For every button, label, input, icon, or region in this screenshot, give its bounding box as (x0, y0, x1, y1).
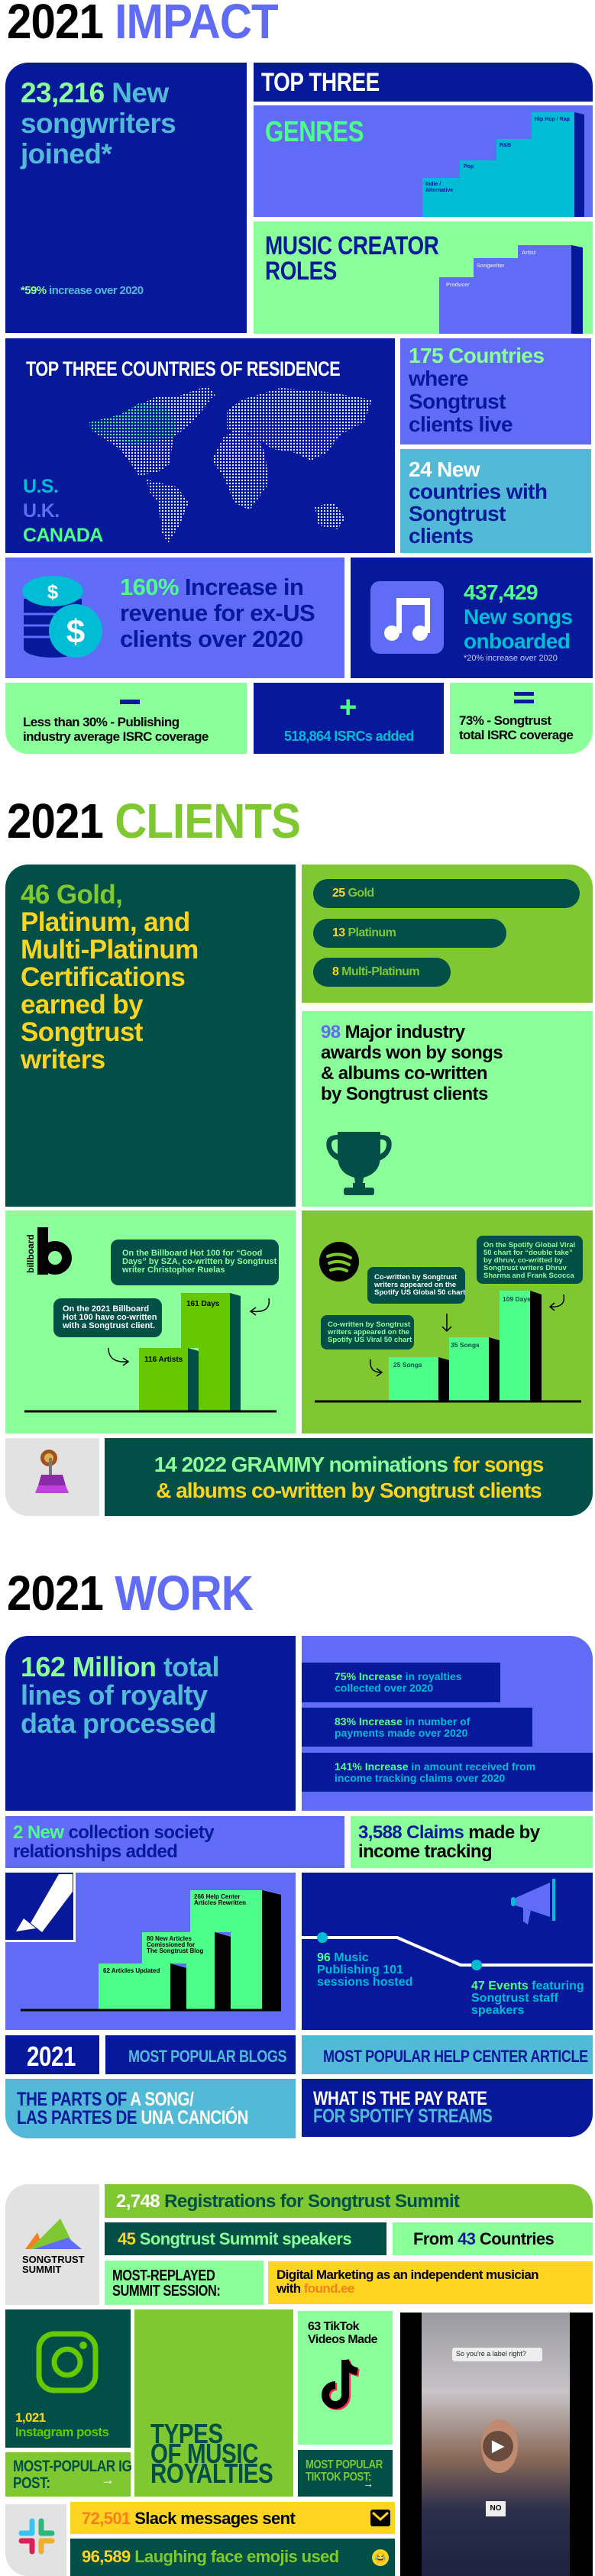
panel: spotify pay rate (302, 2079, 593, 2137)
panel: certifications: Songtrust (21, 1017, 143, 1047)
callout: double take (477, 1236, 583, 1284)
label: most popular help center article: MOST POPULAR HELP CENTER ARTICLE (323, 2047, 588, 2066)
panel: digital marketing session: Digital Marketing as an independent musician (276, 2267, 538, 2282)
panel: increases (302, 1636, 593, 1811)
label: 2021: 2021 (27, 2041, 76, 2072)
stat text: songwriters: 23,216 New (21, 77, 169, 108)
label: most popular blogs: MOST POPULAR BLOGS (128, 2047, 286, 2066)
icon: slack (18, 2519, 55, 2554)
panel: songtrust ISRC: 73% - Songtrust (459, 713, 551, 728)
icon: billboard logo (25, 1227, 72, 1275)
callout: global 50: Co-written by Songtrust (374, 1273, 457, 1282)
bar: multi-platinum: 8 Multi-Platinum (332, 965, 419, 978)
icon: envelope (370, 2510, 390, 2526)
chart: spotify bars: 35 Songs (451, 1341, 480, 1349)
callout: 2021 hot 100: On the 2021 Billboard (63, 1304, 149, 1314)
label: most popular IG post (5, 2452, 131, 2497)
bar: royalties (302, 1663, 500, 1702)
bar: royalties: 75% Increase in royalties (335, 1670, 462, 1682)
video: tiktok post: So you're a label right? (456, 2350, 526, 2358)
panel: 175 countries: Songtrust (409, 389, 506, 413)
callout: 2021 hot 100: with a Songtrust client. (63, 1321, 155, 1330)
chart: spotify bars: 25 Songs (393, 1361, 422, 1369)
callout: double take: 50 chart for “double take” (483, 1249, 573, 1257)
label: most popular tiktok post: MOST POPULAR (306, 2458, 383, 2471)
panel: certifications: 46 Gold, (21, 880, 122, 910)
panel: grammy nominations: & albums co-written by Songtrust clients (156, 1479, 542, 1502)
panel: grammy nominations (105, 1438, 593, 1516)
panel: awards: & albums co-written (321, 1063, 487, 1084)
chart: genres bars: Hip Hop / Rap (535, 117, 570, 122)
panel: royalty data: 162 Million total (21, 1651, 219, 1682)
panel: royalty data (5, 1636, 296, 1811)
panel: grammy icon (5, 1438, 99, 1516)
stat text: songwriters (20, 77, 176, 170)
panel: summit speakers (105, 2222, 386, 2255)
panel: 24 new countries: Songtrust (409, 502, 506, 525)
stat text: songs: New songs (464, 605, 572, 629)
stat text: sessions (317, 1951, 412, 1989)
icon: coins: $ (66, 613, 85, 651)
panel: slack messages: 72,501 Slack messages sent (82, 2509, 295, 2528)
chart: roles bars: Producer (446, 283, 470, 288)
panel: blog parts of a song: THE PARTS OF A SONG/ (17, 2089, 193, 2110)
panel: 24 new countries: countries with (409, 480, 547, 503)
video: tiktok post: NO (490, 2504, 501, 2513)
panel: certifications: Certifications (21, 962, 185, 992)
icon: laughing emoji (372, 2549, 389, 2566)
bar: royalties: collected over 2020 (335, 1682, 433, 1694)
panel: 43 countries: From 43 Countries (413, 2229, 554, 2248)
panel: laughing emojis: 96,589 Laughing face emojis used (82, 2547, 339, 2566)
icon: spotify logo (319, 1242, 359, 1282)
panel: tiktok (298, 2311, 393, 2445)
video: tiktok post (400, 2313, 593, 2576)
panel: instagram (5, 2309, 131, 2448)
bar: gold (313, 879, 580, 908)
panel: awards: awards won by songs (321, 1042, 503, 1063)
heading: roles: MUSIC CREATOR (265, 231, 439, 260)
panel: ISRCs added: 518,864 ISRCs added (284, 729, 414, 744)
chart: genres bars: Pop (464, 164, 474, 170)
panel: summit logo (5, 2184, 99, 2305)
stat text: sessions: 96 Music (317, 1951, 369, 1964)
panel: ISRCs added (254, 683, 444, 754)
panel: types of music royalties: OF MUSIC (150, 2438, 258, 2469)
callout: 2021 hot 100: Hot 100 have co-written (63, 1313, 157, 1322)
panel: collection societies: relationships added (13, 1841, 177, 1862)
panel: industry ISRC: industry average ISRC coverage (23, 729, 209, 744)
chart: article bars: 62 Articles Updated (103, 1967, 160, 1974)
stat text: songwriters: songwriters (21, 108, 176, 139)
panel: articles chart (5, 1873, 296, 2030)
chart: billboard bars (24, 1293, 276, 1413)
bar: platinum (313, 919, 506, 948)
bar: multi-platinum (313, 958, 451, 987)
panel: awards: by Songtrust clients (321, 1084, 488, 1104)
panel: songtrust ISRC: total ISRC coverage (459, 728, 573, 742)
map: dotted world (89, 386, 371, 542)
label: most popular IG post: → (101, 2472, 115, 2487)
chart: article bars: The Songtrust Blog (147, 1947, 203, 1954)
stat text: revenue: revenue for ex-US (120, 600, 315, 626)
panel: top three countries map (5, 338, 395, 553)
panel: instagram: 1,021 (15, 2410, 46, 2425)
panel: billboard chart (5, 1210, 296, 1433)
callout: double take: Sharma and Frank Scocca (483, 1272, 574, 1280)
callout: good days (111, 1240, 279, 1285)
chart: genres bars: Indie / (425, 182, 441, 187)
panel: certifications: writers (21, 1045, 105, 1075)
bar: platinum: 13 Platinum (332, 926, 396, 939)
panel: tiktok: Videos Made (308, 2333, 377, 2346)
icon: grammy (35, 1450, 69, 1493)
icon: instagram (37, 2331, 98, 2393)
label: most popular IG post: MOST-POPULAR IG (13, 2458, 132, 2475)
label: most popular blogs (105, 2035, 296, 2074)
panel: revenue increase (5, 558, 344, 678)
panel: new songwriters (5, 63, 247, 333)
panel: claims (351, 1816, 593, 1868)
stat text: songs: 437,429 (464, 580, 538, 604)
panel: new songs: *20% increase over 2020 (464, 654, 558, 663)
callout: double take: On the Spotify Global Viral (483, 1241, 575, 1249)
panel: royalty data: data processed (21, 1708, 216, 1739)
icon: tiktok (322, 2359, 360, 2410)
icon: summit mountain (25, 2219, 82, 2249)
chart: genres bars (422, 112, 584, 217)
callout: double take: by dhruv, co-writted by (483, 1256, 563, 1265)
panel: industry ISRC: Less than 30% - Publishing (23, 715, 179, 729)
panel: 175 countries (400, 338, 591, 444)
list: countries (23, 476, 103, 546)
stat text: revenue: clients over 2020 (120, 625, 303, 652)
stat text: revenue (120, 574, 315, 652)
panel: summit logo: SONGTRUST (22, 2254, 85, 2265)
bar: tracking claims: income tracking claims over 2020 (335, 1772, 505, 1784)
panel: certifications: earned by (21, 990, 143, 1020)
panel: spotify chart (302, 1210, 593, 1433)
label: most popular tiktok post: → (363, 2477, 373, 2490)
footnote: *59% increase over 2020 (21, 284, 144, 297)
panel: spotify pay rate: WHAT IS THE PAY RATE (313, 2088, 487, 2109)
chart: roles bars (439, 245, 583, 334)
panel: blog parts of a song: LAS PARTES DE UNA CANCIÓN (17, 2107, 248, 2128)
chart: genres bars: Alternative (425, 188, 453, 193)
line: timeline (302, 1932, 593, 1970)
chart: article bars: 266 Help Center (194, 1893, 240, 1900)
stat text: sessions: Publishing 101 (317, 1964, 403, 1976)
panel: new songs (351, 558, 593, 678)
label: most popular tiktok post: TIKTOK POST: (306, 2471, 371, 2484)
label: most replayed: MOST-REPLAYED (112, 2267, 215, 2284)
icon: laughing emoji: 😂 (375, 2552, 386, 2563)
icon: music note (370, 581, 444, 654)
panel: slack icon (5, 2504, 66, 2576)
panel: royalty data: lines of royalty (21, 1679, 207, 1711)
chart: roles bars: Songwriter (477, 263, 505, 269)
panel: summit registrations: 2,748 Registrations for Songtrust Summit (116, 2191, 459, 2212)
video: tiktok post: ▶ (492, 2438, 504, 2455)
panel: certifications (5, 865, 296, 1207)
icon: billboard logo: billboard (25, 1234, 36, 1273)
heading: genres: GENRES (265, 116, 364, 148)
panel: industry ISRC (5, 683, 247, 754)
panel: events timeline (302, 1873, 593, 2030)
heading: countries: TOP THREE COUNTRIES OF RESIDENCE (26, 357, 340, 380)
panel: certifications: Platinum, and (21, 907, 190, 937)
callout: viral 50: Spotify US Viral 50 chart (328, 1336, 412, 1344)
stat text: songwriters: joined* (21, 138, 112, 170)
stat text: songs: onboarded (464, 629, 570, 653)
callout: global 50: writers appeared on the (374, 1281, 456, 1289)
label: most replayed: SUMMIT SESSION: (112, 2283, 220, 2300)
panel: instagram: Instagram posts (15, 2425, 108, 2439)
panel: claims: income tracking (358, 1841, 492, 1862)
callout: viral 50 (321, 1315, 414, 1349)
heading: top three (254, 63, 593, 102)
panel: genres (254, 105, 593, 217)
chart: billboard bars: 116 Artists (144, 1356, 183, 1364)
callout: global 50: Spotify US Global 50 chart (374, 1288, 465, 1297)
stat text: events: Songtrust staff (471, 1992, 558, 2005)
callout: double take: Songtrust writers Dhruv (483, 1264, 567, 1272)
chart: spotify bars (315, 1291, 581, 1402)
icon: megaphone (511, 1879, 555, 1925)
panel: summit speakers: 45 Songtrust Summit speakers (118, 2229, 351, 2248)
panel: 24 new countries: clients (409, 524, 474, 548)
panel: awards (302, 1011, 593, 1207)
list: countries: U.S. (23, 476, 58, 497)
panel: songtrust ISRC (450, 683, 593, 754)
heading: roles (265, 231, 439, 286)
bar: tracking claims: 141% Increase in amount received from (335, 1760, 535, 1773)
label: most replayed (105, 2261, 264, 2305)
title: 2021 work: 2021 WORK (7, 1566, 253, 1621)
panel: ISRCs added: + (339, 690, 357, 724)
panel: 175 countries: clients live (409, 412, 513, 436)
stat text: events: 47 Events featuring (471, 1980, 584, 1993)
icon: pencil (5, 1873, 76, 1942)
icon: coins: $ (47, 580, 59, 603)
callout: 2021 hot 100 (53, 1298, 162, 1337)
callout: good days: On the Billboard Hot 100 for “Good (122, 1249, 262, 1258)
label: most popular help center article (302, 2035, 593, 2074)
bar: payments: payments made over 2020 (335, 1727, 467, 1739)
heading: roles: ROLES (265, 257, 337, 286)
stat text: songs (464, 580, 572, 653)
callout: global 50 (367, 1267, 465, 1304)
panel: 43 countries (393, 2222, 593, 2255)
callout: good days: writer Christopher Ruelas (122, 1265, 225, 1275)
panel: awards: 98 Major industry (321, 1022, 465, 1042)
panel: summit logo: SUMMIT (22, 2264, 61, 2275)
panel: summit registrations (105, 2184, 593, 2218)
chart: article bars (21, 1890, 281, 2012)
bar: tracking claims (302, 1753, 593, 1792)
label: most popular IG post: POST: (13, 2474, 50, 2492)
panel: types of music royalties: ROYALTIES (150, 2458, 273, 2489)
panel: 175 countries: 175 Countries (409, 344, 544, 367)
bar: gold: 25 Gold (332, 887, 374, 900)
panel: digital marketing session: with found.ee (276, 2281, 354, 2296)
stat text: revenue: 160% Increase in (120, 574, 303, 600)
chart: article bars: Articles Rewritten (194, 1899, 246, 1906)
stat text: events (471, 1980, 584, 2017)
panel: laughing emojis (70, 2539, 395, 2576)
stat text: events: speakers (471, 2004, 524, 2017)
stat text: sessions: sessions hosted (317, 1976, 412, 1989)
panel: spotify pay rate: FOR SPOTIFY STREAMS (313, 2106, 492, 2127)
label: 2021 (5, 2035, 99, 2074)
bar: payments: 83% Increase in number of (335, 1715, 470, 1728)
icon: trophy (326, 1132, 392, 1195)
heading: top three: TOP THREE (261, 68, 380, 97)
label: most popular tiktok post (298, 2450, 393, 2497)
panel: claims: 3,588 Claims made by (358, 1822, 539, 1843)
panel: music creator roles (254, 221, 593, 334)
panel: types of music royalties (134, 2309, 293, 2497)
panel: types of music royalties: TYPES (150, 2418, 223, 2449)
chart: article bars: 80 New Articles (147, 1935, 192, 1942)
chart: billboard bars: 161 Days (186, 1300, 220, 1308)
panel: tiktok: 63 TikTok (308, 2320, 359, 2333)
title: 2021 clients: 2021 CLIENTS (7, 793, 300, 848)
panel: blog parts of a song (5, 2079, 296, 2138)
list: countries: CANADA (23, 525, 103, 546)
chart: article bars: Comissioned for (147, 1941, 195, 1948)
callout: viral 50: writers appeared on the (328, 1328, 409, 1336)
chart: roles bars: Artist (522, 250, 536, 256)
icon: coins (22, 576, 102, 658)
panel: slack messages (70, 2502, 395, 2534)
bar: payments (302, 1708, 532, 1747)
panel: certifications: Multi-Platinum (21, 935, 199, 965)
panel: 24 new countries (400, 449, 591, 553)
panel: cert bars (302, 865, 593, 1003)
callout: viral 50: Co-written by Songtrust (328, 1320, 410, 1329)
chart: spotify bars: 109 Days (503, 1295, 531, 1303)
panel: collection societies: 2 New collection society (13, 1822, 214, 1843)
list: countries: U.K. (23, 500, 60, 522)
panel: collection societies (5, 1816, 344, 1868)
panel: 175 countries: where (409, 367, 468, 390)
panel: 24 new countries: 24 New (409, 457, 480, 481)
callout: good days: Days” by SZA, co-written by Songtrust (122, 1257, 276, 1266)
panel: digital marketing session (268, 2261, 593, 2304)
panel: grammy nominations: 14 2022 GRAMMY nominations for songs (154, 1453, 543, 1476)
chart: genres bars: R&B (500, 143, 511, 148)
